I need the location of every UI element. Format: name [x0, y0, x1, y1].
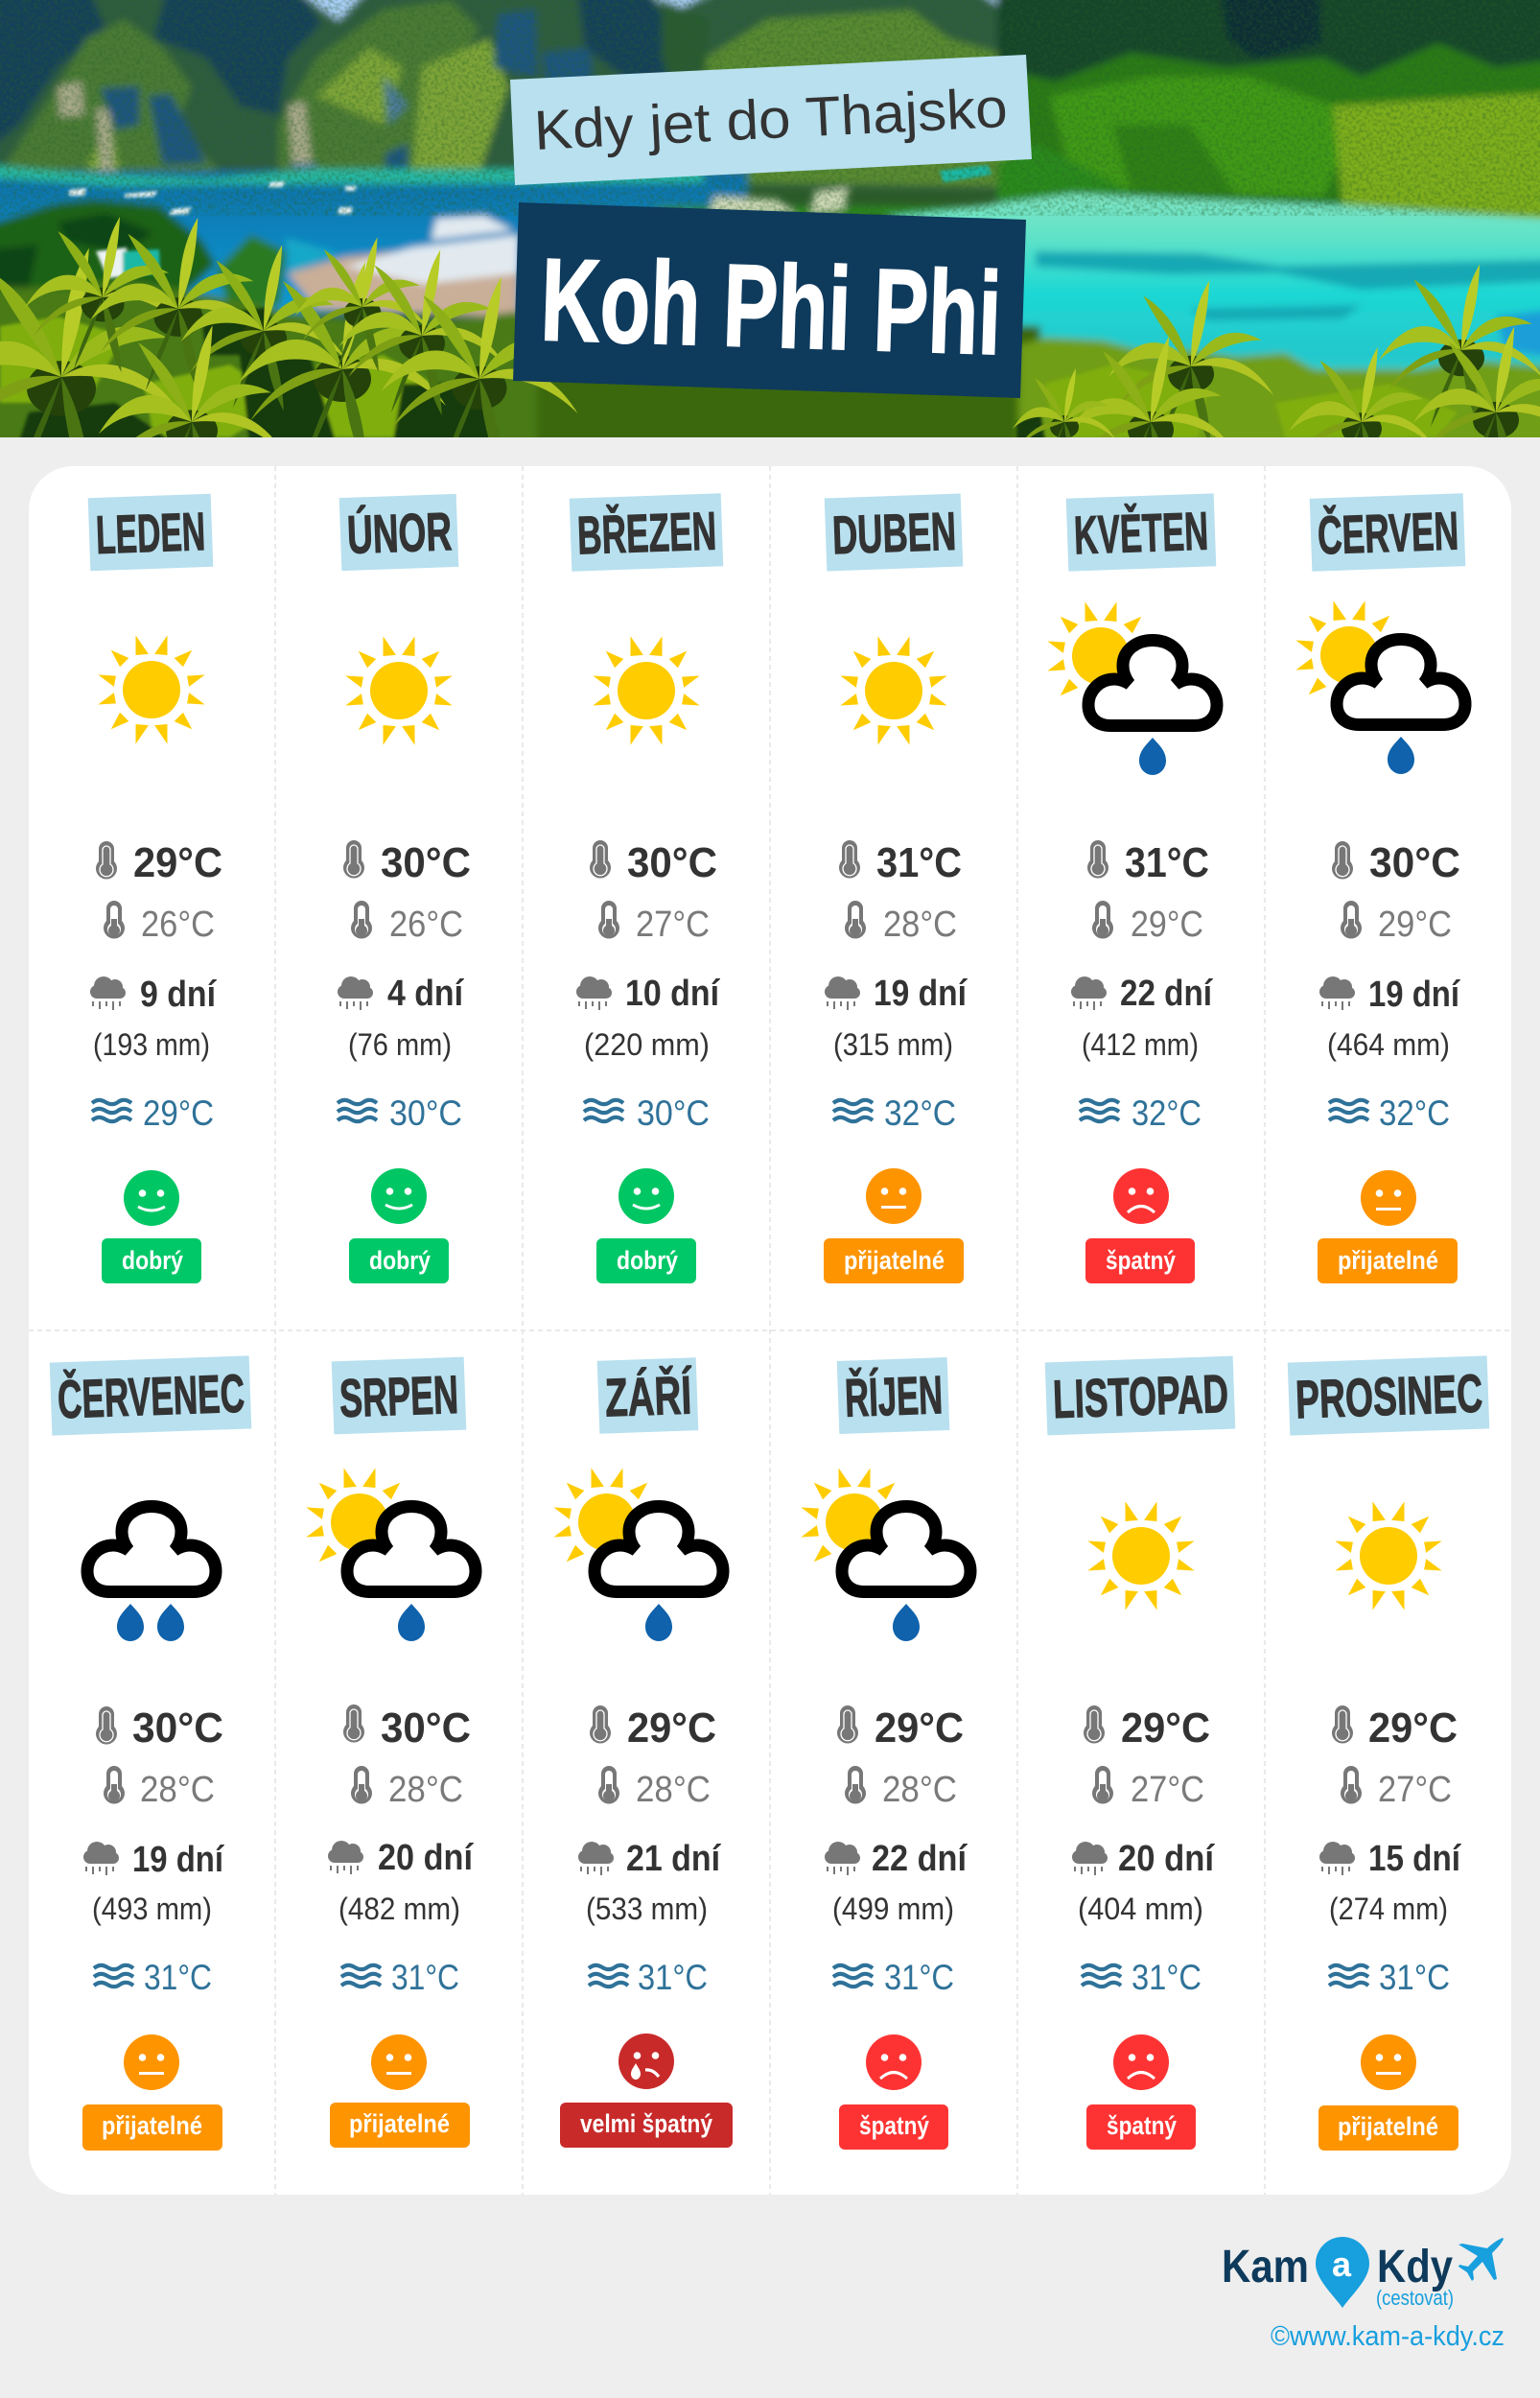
- rainy days: 19 dní: [1368, 975, 1460, 1015]
- max temperature: 30°C: [381, 1704, 471, 1751]
- rating badge: [330, 2103, 470, 2148]
- title: Kdy jet do Thajsko: [510, 55, 1032, 185]
- month label: ŘÍJEN: [844, 1364, 944, 1428]
- icon: max thermometer: [837, 1705, 858, 1744]
- icon: min thermometer: [845, 1766, 866, 1804]
- weather icon: sun and cloud with drop: [306, 1468, 476, 1641]
- rating badge: [824, 1238, 964, 1283]
- rating face: [371, 1168, 427, 1224]
- rating face: [866, 1168, 922, 1224]
- month label: ČERVENEC: [57, 1363, 245, 1429]
- icon: rain cloud: [578, 1842, 614, 1875]
- max temperature: 30°C: [1369, 839, 1460, 886]
- icon: max thermometer: [590, 840, 611, 879]
- month label: [50, 1355, 251, 1436]
- rainy days: 10 dní: [625, 974, 720, 1014]
- month label: LISTOPAD: [1052, 1363, 1229, 1429]
- weather icon: cloud with two drops: [87, 1506, 216, 1641]
- rating badge: přijatelné: [1338, 2112, 1438, 2141]
- icon: waves: [1082, 1965, 1121, 1987]
- rainy days: 9 dní: [140, 975, 217, 1015]
- photo banner: Koh Phi Phi bay: [0, 0, 1540, 437]
- max temperature: 29°C: [133, 839, 222, 886]
- icon: waves: [833, 1965, 873, 1987]
- min temperature: 28°C: [388, 1770, 463, 1810]
- icon: map pin with letter a: a: [1332, 2245, 1352, 2284]
- month label: [597, 1357, 698, 1434]
- rainfall: (533 mm): [586, 1892, 708, 1926]
- icon: max thermometer: [1332, 1705, 1353, 1744]
- rainy days: 22 dní: [872, 1839, 968, 1879]
- month label: [88, 494, 213, 571]
- icon: airplane: [1458, 2238, 1504, 2281]
- month label: [570, 493, 723, 572]
- icon: rain cloud: [328, 1841, 363, 1874]
- min temperature: 27°C: [1378, 1770, 1452, 1810]
- water temperature: 29°C: [143, 1093, 214, 1133]
- weather icon: sun: [593, 636, 700, 745]
- month label: [1066, 493, 1216, 572]
- panel: months table: [29, 466, 1511, 2195]
- icon: rain cloud: [1319, 976, 1355, 1010]
- month: březen: [570, 493, 723, 1283]
- weather icon: sun: [840, 636, 947, 745]
- rating face: [124, 1170, 179, 1226]
- rainy days: 19 dní: [874, 974, 968, 1014]
- icon: min thermometer: [104, 1766, 125, 1804]
- icon: waves: [584, 1100, 623, 1121]
- icon: rain cloud: [1072, 1842, 1108, 1875]
- weather icon: sun: [98, 635, 205, 744]
- rating badge: [1318, 2105, 1458, 2151]
- rainfall: (412 mm): [1082, 1027, 1199, 1062]
- month: říjen: [801, 1357, 970, 2150]
- rating badge: [596, 1238, 696, 1283]
- icon: min thermometer: [1092, 901, 1113, 939]
- min temperature: 27°C: [636, 905, 710, 945]
- icon: waves: [833, 1100, 873, 1121]
- month: červenec: [50, 1355, 251, 2151]
- min temperature: 29°C: [1378, 905, 1452, 945]
- min temperature: 28°C: [883, 905, 957, 945]
- icon: rain cloud: [1071, 976, 1107, 1010]
- icon: min thermometer: [104, 901, 125, 939]
- water temperature: 31°C: [638, 1958, 708, 1997]
- title: Koh Phi Phi: Koh Phi Phi: [539, 234, 1003, 379]
- rainfall: (464 mm): [1327, 1027, 1450, 1062]
- rainy days: 4 dní: [387, 974, 464, 1014]
- icon: rain cloud: [90, 976, 126, 1010]
- rating badge: špatný: [1107, 2111, 1177, 2140]
- rating badge: přijatelné: [1338, 1246, 1438, 1275]
- month label: [837, 1357, 949, 1434]
- rating badge: špatný: [859, 2111, 929, 2140]
- rating badge: [82, 2104, 222, 2151]
- rating badge: [1085, 1238, 1195, 1283]
- icon: waves: [1080, 1100, 1119, 1121]
- rating face: [618, 2034, 674, 2089]
- month: srpen: [306, 1357, 476, 2148]
- logo subtitle: (cestovat): [1376, 2286, 1454, 2310]
- month: červen: [1295, 493, 1465, 1283]
- month label: SRPEN: [338, 1364, 459, 1428]
- max temperature: 29°C: [627, 1704, 716, 1751]
- rating badge: špatný: [1106, 1246, 1176, 1275]
- website credit: ©www.kam-a-kdy.cz: [1271, 2321, 1505, 2352]
- rainfall: (315 mm): [833, 1027, 953, 1062]
- rainy days: 21 dní: [626, 1839, 721, 1879]
- icon: min thermometer: [351, 901, 372, 939]
- icon: waves: [1329, 1100, 1368, 1121]
- max temperature: 30°C: [381, 839, 471, 886]
- water temperature: 32°C: [884, 1093, 956, 1133]
- water temperature: 30°C: [637, 1093, 710, 1133]
- icon: min thermometer: [351, 1766, 372, 1804]
- rating badge: [560, 2103, 733, 2148]
- icon: waves: [1329, 1965, 1368, 1987]
- month label: ZÁŘÍ: [604, 1364, 693, 1428]
- weather icon: sun and cloud with drop: [801, 1468, 970, 1641]
- month: duben: [824, 494, 968, 1283]
- month label: KVĚTEN: [1073, 501, 1209, 565]
- water temperature: 31°C: [391, 1958, 459, 1997]
- icon: max thermometer: [839, 840, 860, 879]
- month label: [332, 1357, 466, 1434]
- logo word Kam: Kam: [1222, 2242, 1309, 2292]
- rating face: [371, 2034, 427, 2090]
- rainfall: (274 mm): [1329, 1892, 1448, 1926]
- rainfall: (499 mm): [832, 1892, 954, 1926]
- max temperature: 29°C: [1121, 1704, 1210, 1751]
- icon: map pin with letter a: [1316, 2237, 1369, 2308]
- max temperature: 30°C: [627, 839, 717, 886]
- max temperature: 29°C: [875, 1704, 964, 1751]
- icon: max thermometer: [96, 841, 117, 880]
- icon: rain cloud: [825, 1842, 860, 1875]
- rating badge: [349, 1238, 449, 1283]
- max temperature: 29°C: [1368, 1704, 1458, 1751]
- rainfall: (493 mm): [92, 1892, 212, 1926]
- rainy days: 20 dní: [1118, 1839, 1215, 1879]
- icon: rain cloud: [83, 1842, 119, 1875]
- icon: waves: [92, 1100, 131, 1121]
- rating face: [1361, 1170, 1416, 1226]
- max temperature: 30°C: [132, 1704, 223, 1751]
- month label: DUBEN: [831, 501, 957, 565]
- month: listopad: [1045, 1356, 1235, 2150]
- min temperature: 29°C: [1131, 905, 1203, 945]
- weather icon: sun: [1335, 1501, 1442, 1610]
- icon: min thermometer: [845, 901, 866, 939]
- water temperature: 31°C: [1379, 1958, 1450, 1997]
- water temperature: 30°C: [389, 1093, 462, 1133]
- logo word Kdy: Kdy: [1377, 2242, 1453, 2292]
- water temperature: 32°C: [1379, 1093, 1450, 1133]
- icon: rain cloud: [1319, 1842, 1355, 1875]
- icon: min thermometer: [1341, 1766, 1362, 1804]
- icon: waves: [589, 1965, 628, 1987]
- month label: BŘEZEN: [576, 500, 717, 565]
- min temperature: 28°C: [636, 1770, 711, 1810]
- min temperature: 28°C: [882, 1770, 957, 1810]
- icon: waves: [338, 1100, 377, 1121]
- icon: rain cloud: [825, 976, 860, 1010]
- icon: min thermometer: [1341, 901, 1362, 939]
- icon: max thermometer: [343, 840, 364, 879]
- rating badge: dobrý: [617, 1246, 678, 1275]
- rating face: [1113, 1168, 1169, 1224]
- month label: [1310, 493, 1465, 572]
- month: leden: [88, 494, 222, 1283]
- rating badge: přijatelné: [349, 2109, 450, 2138]
- month label: [1288, 1355, 1489, 1436]
- rating face: [1113, 2034, 1169, 2090]
- weather icon: sun: [1087, 1501, 1195, 1610]
- title: Kdy jet do Thajsko: Kdy jet do Thajsko: [532, 77, 1009, 162]
- rainfall: (220 mm): [584, 1027, 710, 1062]
- water temperature: 31°C: [884, 1958, 954, 1997]
- min temperature: 27°C: [1131, 1770, 1204, 1810]
- rating badge: dobrý: [369, 1246, 431, 1275]
- icon: max thermometer: [1084, 1705, 1105, 1744]
- icon: max thermometer: [96, 1706, 117, 1745]
- rating face: [124, 2034, 179, 2090]
- month label: ÚNOR: [346, 501, 453, 565]
- max temperature: 31°C: [1125, 839, 1209, 886]
- rating badge: [1318, 1238, 1458, 1283]
- month label: LEDEN: [95, 501, 206, 565]
- icon: rain cloud: [576, 976, 612, 1010]
- icon: min thermometer: [1092, 1766, 1113, 1804]
- rainfall: (76 mm): [348, 1027, 452, 1062]
- min temperature: 26°C: [141, 905, 215, 945]
- icon: max thermometer: [1332, 841, 1353, 880]
- rating badge: přijatelné: [102, 2111, 202, 2140]
- rating badge: [839, 2104, 948, 2150]
- month: prosinec: [1288, 1355, 1489, 2151]
- water temperature: 31°C: [1132, 1958, 1202, 1997]
- icon: max thermometer: [1087, 840, 1108, 879]
- month: únor: [338, 494, 471, 1283]
- month label: [1045, 1356, 1235, 1435]
- rainy days: 19 dní: [132, 1840, 224, 1880]
- max temperature: 31°C: [876, 839, 962, 886]
- rainfall: (482 mm): [338, 1892, 460, 1926]
- icon: max thermometer: [343, 1704, 364, 1743]
- water temperature: 31°C: [144, 1958, 212, 1997]
- weather icon: sun and cloud with drop: [1295, 600, 1465, 774]
- icon: min thermometer: [598, 901, 619, 939]
- rating badge: dobrý: [122, 1246, 183, 1275]
- rating badge: [1086, 2104, 1196, 2150]
- month: květen: [1047, 493, 1217, 1283]
- logo: Kam a Kdy (cestovat): [1222, 2237, 1504, 2310]
- rainy days: 15 dní: [1368, 1839, 1461, 1879]
- weather icon: sun: [345, 636, 453, 745]
- month label: ČERVEN: [1317, 500, 1459, 566]
- rating face: [1361, 2034, 1416, 2090]
- icon: waves: [94, 1965, 133, 1987]
- title: Koh Phi Phi: [513, 202, 1026, 398]
- rainy days: 22 dní: [1120, 974, 1213, 1014]
- rating badge: velmi špatný: [580, 2109, 712, 2138]
- rainfall: (404 mm): [1078, 1892, 1203, 1926]
- icon: waves: [341, 1965, 381, 1987]
- weather icon: sun and cloud with drop: [553, 1468, 723, 1641]
- icon: min thermometer: [598, 1766, 619, 1804]
- month label: [339, 494, 458, 571]
- month: září: [553, 1357, 733, 2148]
- month label: [825, 494, 963, 571]
- icon: max thermometer: [590, 1705, 611, 1744]
- water temperature: 32°C: [1132, 1093, 1202, 1133]
- rating badge: přijatelné: [844, 1246, 945, 1275]
- rating face: [866, 2034, 922, 2090]
- min temperature: 26°C: [389, 905, 463, 945]
- min temperature: 28°C: [140, 1770, 215, 1810]
- icon: rain cloud: [338, 976, 373, 1010]
- rating face: [618, 1168, 674, 1224]
- weather icon: sun and cloud with drop: [1047, 601, 1217, 775]
- rainfall: (193 mm): [93, 1027, 210, 1062]
- rainy days: 20 dní: [378, 1838, 474, 1878]
- rating badge: [102, 1238, 201, 1283]
